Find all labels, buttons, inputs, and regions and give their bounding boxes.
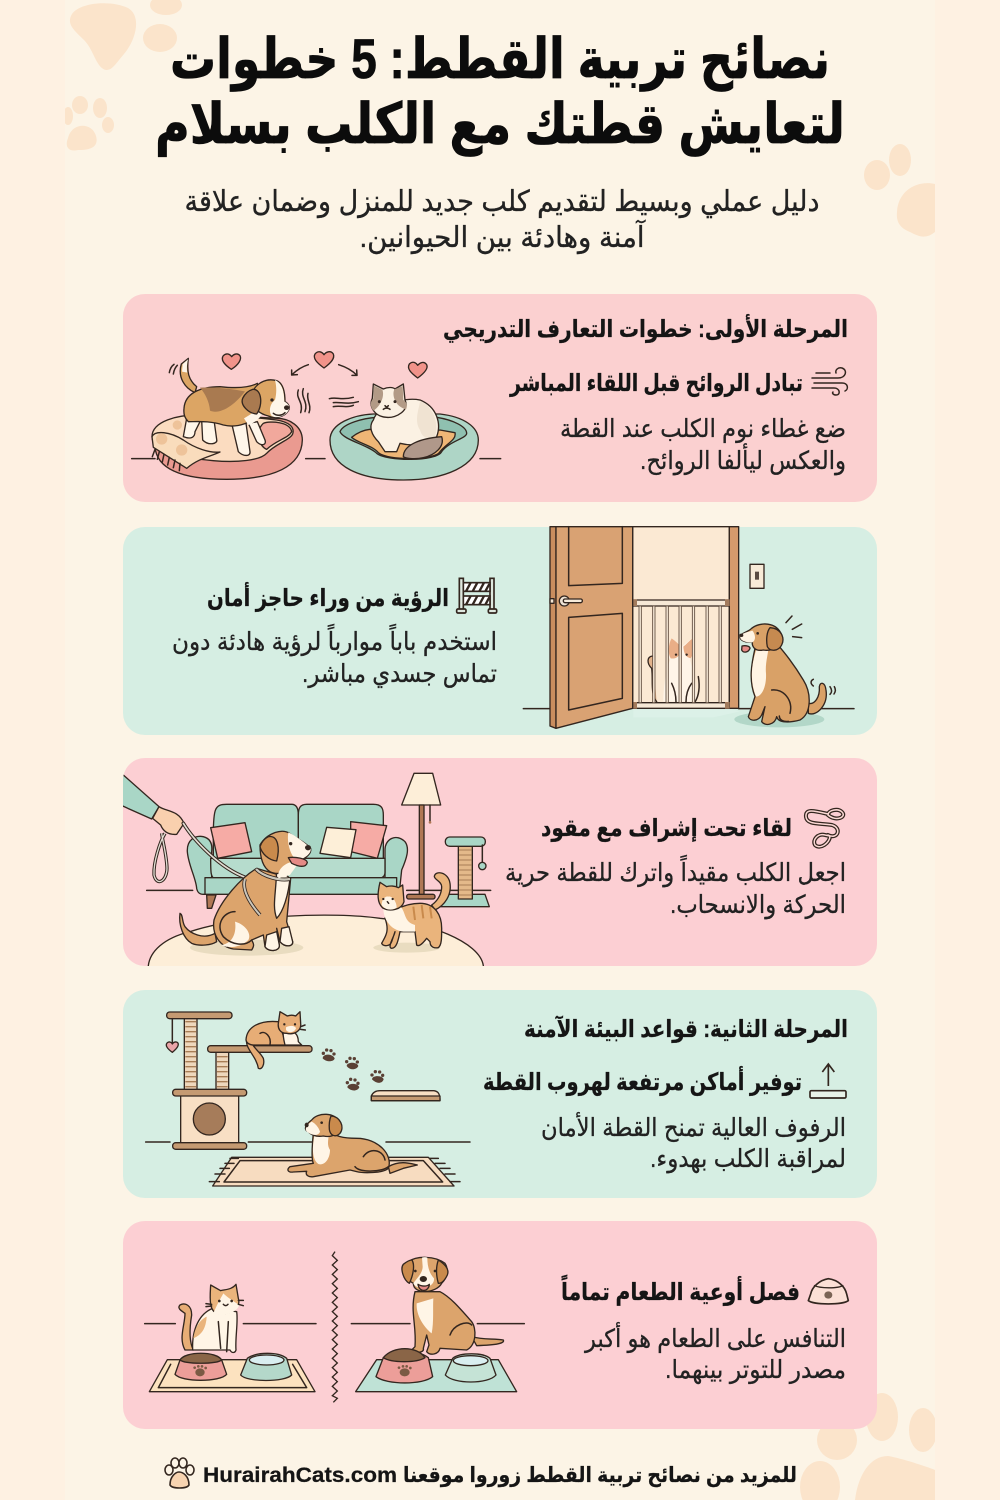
body text: الرفوف العالية تمنح القطة الأمان (541, 1111, 846, 1143)
body text: الحركة والانسحاب. (670, 891, 846, 920)
cat tree (166, 1012, 312, 1149)
illustration: separated feeding stations (145, 1252, 524, 1402)
doorway (633, 527, 739, 708)
panel: scent exchange (123, 294, 877, 502)
footer: website link (165, 1458, 797, 1488)
panel: separate bowls (123, 1221, 877, 1429)
dog water bowl (445, 1354, 496, 1382)
footer: website link: HurairahCats.com (203, 1464, 397, 1487)
green cat bed (330, 414, 478, 480)
title: لتعايش قطتك مع الكلب بسلام (155, 92, 845, 157)
orange tabby cat (373, 873, 450, 953)
cat water bowl (241, 1353, 292, 1380)
rug (148, 914, 484, 966)
scent lines and arrows (169, 364, 358, 413)
leash (154, 823, 246, 882)
heading: phase two: المرحلة الثانية: قواعد البيئة الآمنة (524, 1015, 848, 1043)
body text: اجعل الكلب مقيداً واترك للقطة حرية (505, 855, 846, 888)
subheading: scent swap: تبادل الروائح قبل اللقاء المباشر (509, 370, 803, 397)
body text: مصدر للتوتر بينهما. (665, 1356, 846, 1385)
icon: gate (457, 578, 497, 613)
panel: barrier view (123, 527, 877, 735)
subheading: food bowls: فصل أوعية الطعام تماماً (561, 1275, 800, 1306)
illustration: cat tree and resting dog (146, 1012, 470, 1186)
icon: paw (165, 1458, 194, 1488)
sofa (187, 804, 407, 908)
subheading: high places: توفير أماكن مرتفعة لهروب القطة (483, 1066, 802, 1096)
paw prints trail (322, 1048, 384, 1090)
pink dog bed (152, 414, 302, 479)
body text (172, 624, 497, 688)
subheading: leash: لقاء تحت إشراف مع مقود (541, 815, 792, 842)
dog placemat (356, 1360, 517, 1392)
wavy divider (332, 1252, 337, 1402)
subheading: safe barrier: الرؤية من وراء حاجز أمان (207, 582, 449, 612)
body text: استخدم باباً موارباً لرؤية هادئة دون (172, 624, 497, 657)
panel: high places (123, 990, 877, 1198)
floating shelf (371, 1091, 440, 1101)
heading: phase one: المرحلة الأولى: خطوات التعارف التدريجي (443, 314, 848, 343)
body text (505, 855, 846, 920)
cat scratcher (440, 837, 489, 907)
body text: لمراقبة الكلب بهدوء. (650, 1145, 846, 1174)
illustration: dog and cat on beds (132, 352, 501, 480)
body text: تماس جسدي مباشر. (302, 660, 497, 688)
puppy (180, 358, 289, 455)
sitting dog (734, 616, 835, 727)
body text: والعكس ليألفا الروائح. (640, 442, 846, 476)
illustration: door, gate and dog (523, 527, 854, 728)
body text: التنافس على الطعام هو أكبر (583, 1321, 846, 1353)
rug (209, 1157, 460, 1186)
hearts (222, 352, 427, 378)
icon: wind (812, 368, 847, 395)
open door (550, 527, 633, 728)
baby gate (632, 599, 730, 709)
title: نصائح تربية القطط: 5 خطوات (170, 27, 830, 92)
icon: leash (806, 810, 843, 847)
icon: arrow up on shelf (810, 1064, 846, 1098)
sitting cat (179, 1284, 243, 1352)
floor lamp (402, 773, 441, 899)
body text (560, 415, 846, 476)
dog food bowl (376, 1349, 433, 1383)
light switch (750, 564, 764, 588)
body text (541, 1111, 846, 1174)
cat placemat (149, 1360, 315, 1392)
icon: food bowl (808, 1279, 848, 1304)
subtitle (184, 186, 820, 254)
sitting dog front (402, 1257, 504, 1354)
lounging cat (246, 1012, 305, 1069)
panel: supervised meeting (117, 758, 877, 975)
cat food bowl (175, 1353, 227, 1380)
illustration: living room meeting (117, 772, 491, 975)
subtitle: آمنة وهادئة بين الحيوانين. (360, 219, 646, 254)
title (155, 27, 845, 157)
subtitle: دليل عملي وبسيط لتقديم كلب جديد للمنزل وضمان علاقة (184, 186, 820, 219)
body text: ضع غطاء نوم الكلب عند القطة (560, 415, 846, 444)
hand and sleeve (123, 774, 184, 836)
body text (583, 1321, 846, 1385)
resting dog (288, 1114, 417, 1177)
footer text: للمزيد من نصائح تربية القطط زوروا موقعنا (403, 1464, 797, 1487)
fluffy cat (371, 384, 442, 459)
cat behind gate (648, 638, 699, 702)
sitting dog with harness (180, 831, 311, 956)
